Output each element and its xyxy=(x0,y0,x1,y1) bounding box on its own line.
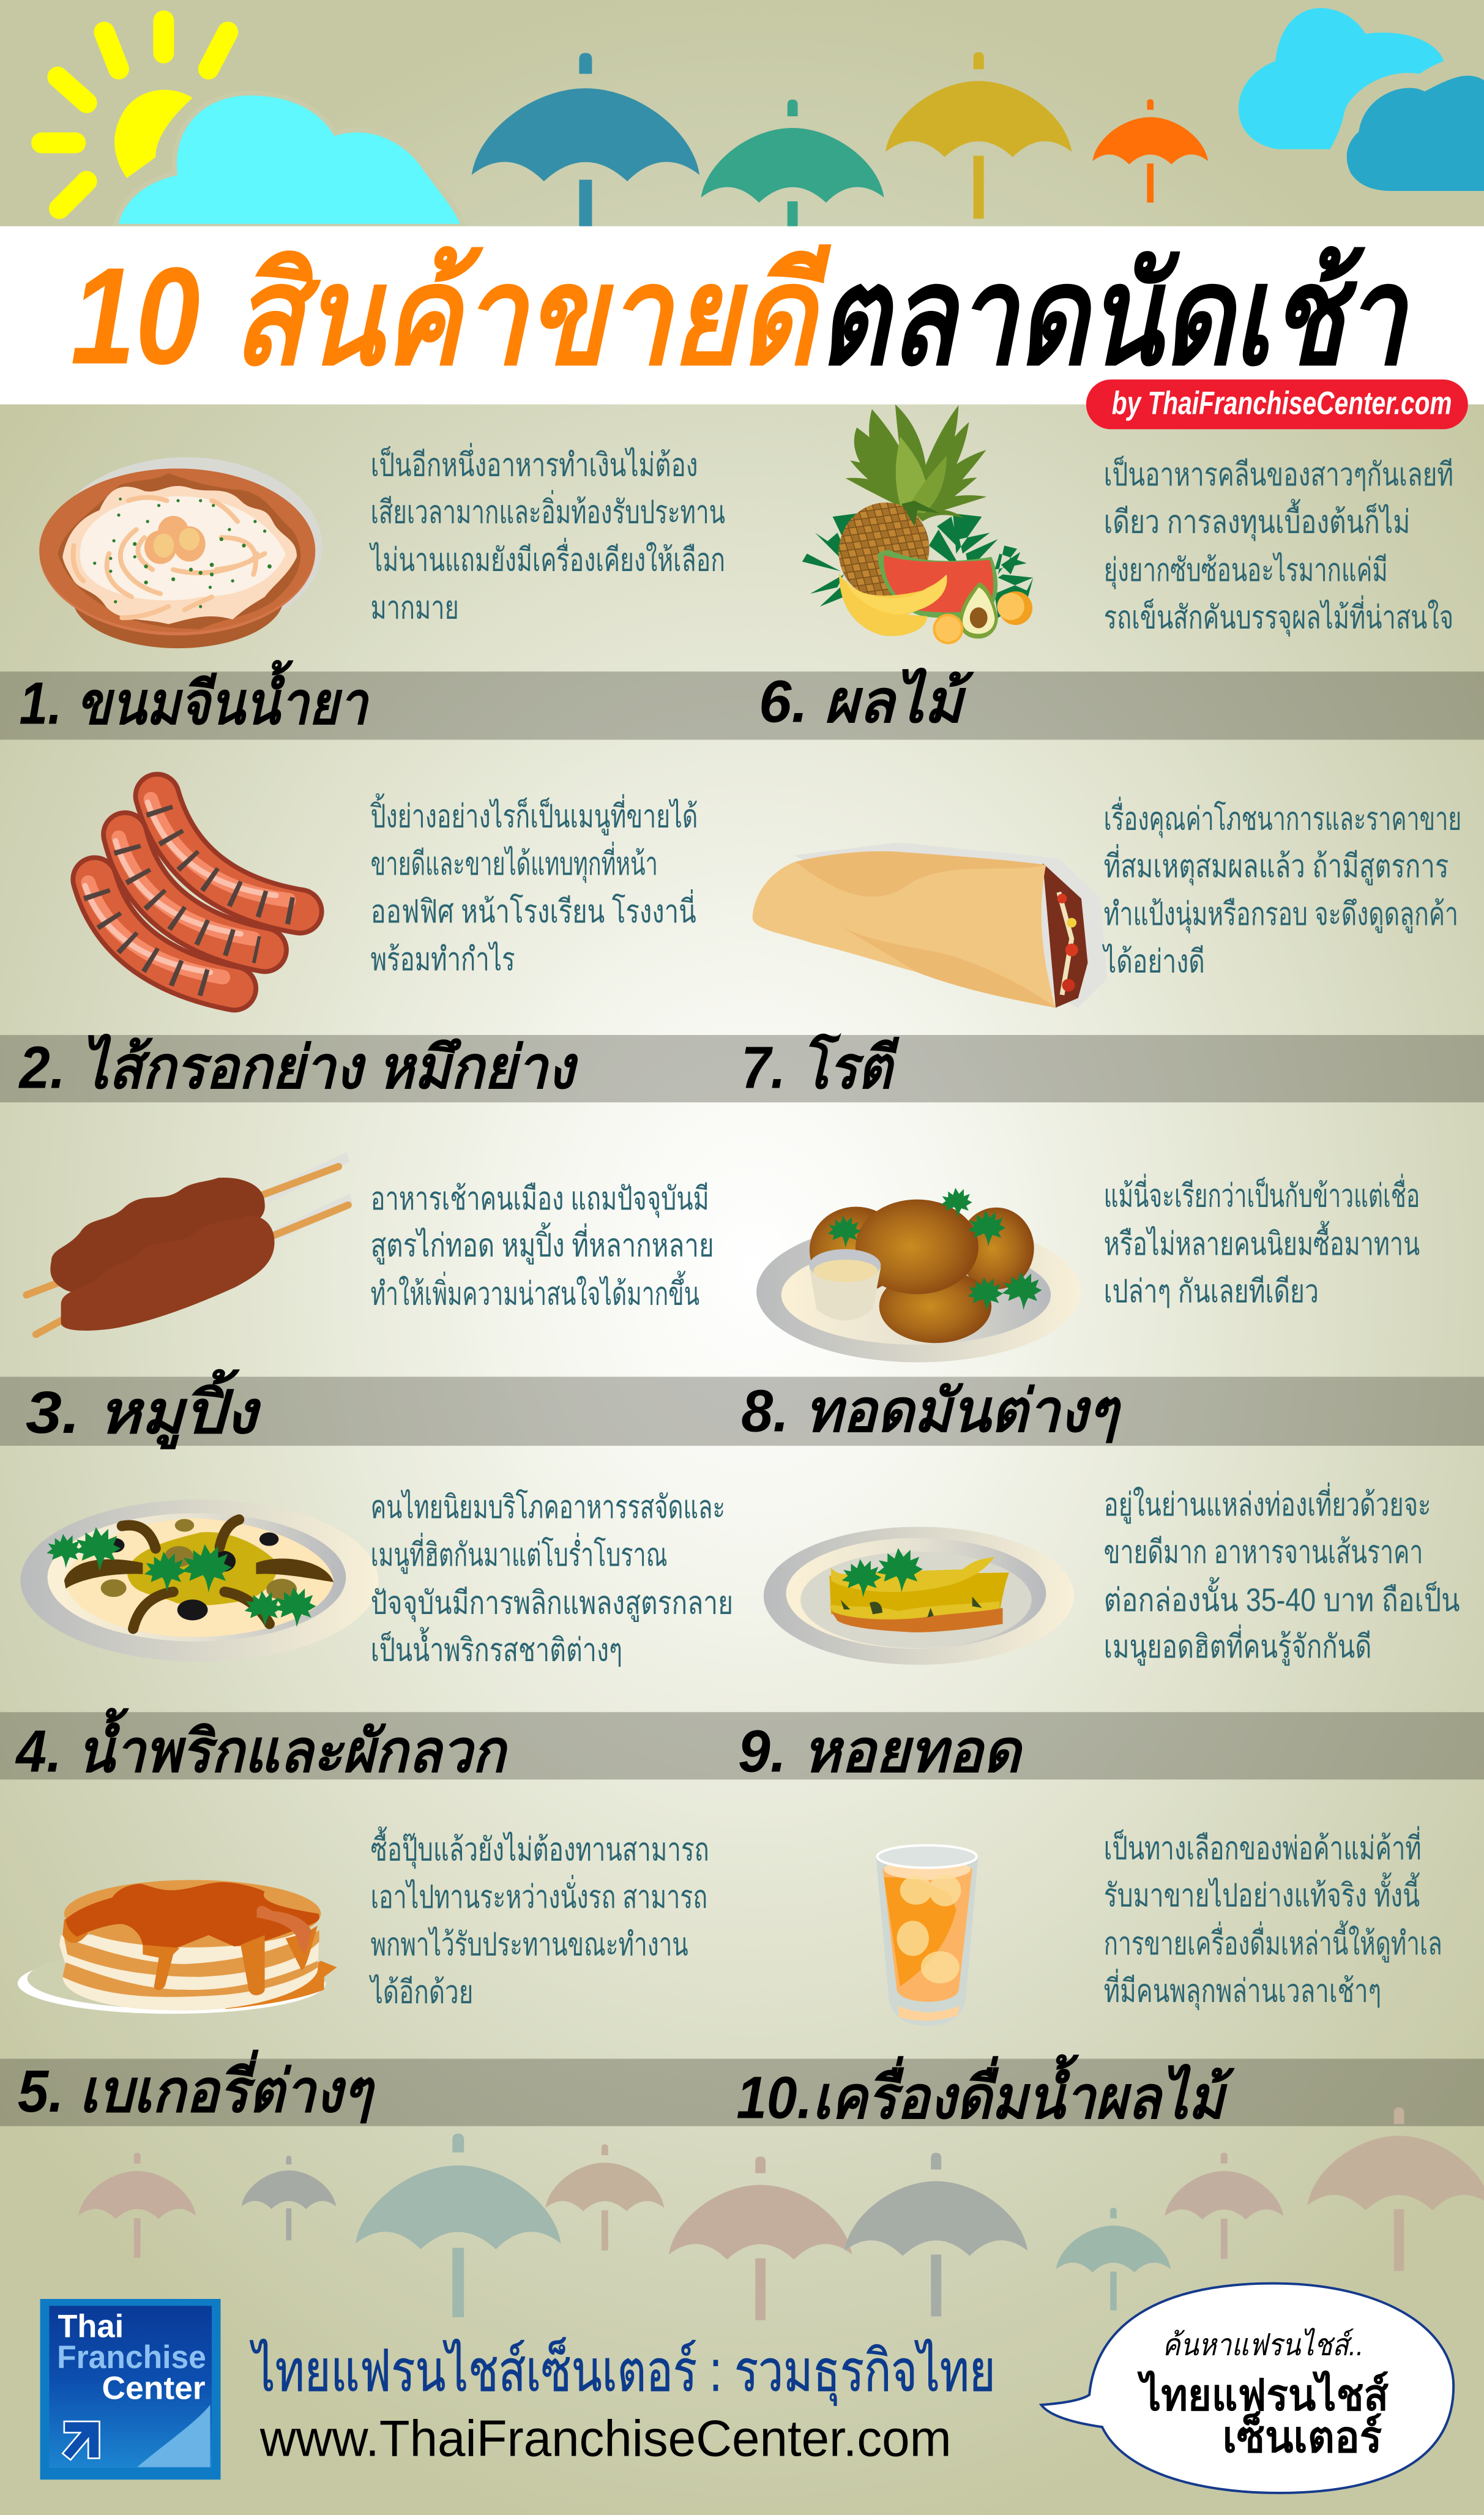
item 4 text xyxy=(371,1489,733,1668)
item 5 text: ซื้อปุ๊บแล้วยังไม่ต้องทานสามารถ xyxy=(371,1826,709,1869)
icon: blue umbrella xyxy=(472,53,699,256)
band 5 xyxy=(0,2049,1484,2131)
logo: Thai Franchise Center: Franchise xyxy=(57,2340,206,2375)
heading 9: 9. หอยทอด xyxy=(738,1717,1023,1784)
item 4 text: คนไทยนิยมบริโภคอาหารรสจัดและ xyxy=(371,1489,725,1525)
band 1 xyxy=(0,659,1484,740)
item 5 text: พกพาไว้รับประทานขณะทำงาน xyxy=(371,1926,688,1963)
icon: sun xyxy=(42,21,228,209)
item 2 text xyxy=(370,793,698,977)
band 2 xyxy=(0,1033,1484,1102)
item 8 illustration: tod man plate xyxy=(756,1188,1081,1362)
item 1 text: มากมาย xyxy=(371,591,459,626)
speech bubble xyxy=(1041,2284,1453,2493)
heading 3: 3. หมูปิ้ง xyxy=(26,1369,262,1449)
item 4 illustration: nam prik plate xyxy=(21,1500,378,1662)
heading 8: 8. ทอดมันต่างๆ xyxy=(741,1377,1122,1444)
item 10 text: ที่มีคนพลุกพล่านเวลาเช้าๆ xyxy=(1104,1969,1381,2011)
item 1 text: เสียเวลามากและอิ่มท้องรับประทาน xyxy=(371,490,725,531)
item 7 illustration: roti xyxy=(753,842,1107,1007)
item 6 text: เดียว การลงทุนเบื้องต้นก็ไม่ xyxy=(1104,498,1410,541)
item 10 illustration: fruit juice glass xyxy=(876,1845,978,2026)
item 5 text: เอาไปทานระหว่างนั่งรถ สามารถ xyxy=(371,1875,707,1915)
item 6 illustration: fruits xyxy=(802,405,1033,645)
badge: by ThaiFranchiseCenter.com xyxy=(1086,379,1468,429)
icon: orange umbrella xyxy=(1092,99,1208,203)
item 5 text xyxy=(369,1826,709,2011)
item 3 text: อาหารเช้าคนเมือง แถมปัจจุบันมี xyxy=(371,1181,709,1218)
icon: yellow umbrella xyxy=(886,52,1072,219)
item 9 illustration: hoi tod plate xyxy=(764,1527,1074,1665)
item 7 text: ได้อย่างดี xyxy=(1102,943,1205,980)
item 3 text: ทำให้เพิ่มความน่าสนใจได้มากขึ้น xyxy=(371,1270,699,1312)
item 8 text: เปล่าๆ กันเลยทีเดียว xyxy=(1104,1274,1319,1309)
item 2 text: พร้อมทำกำไร xyxy=(371,941,515,977)
heading 10: 10.เครื่องดื่มน้ำผลไม้ xyxy=(736,2054,1235,2131)
logo: Thai Franchise Center xyxy=(40,2299,220,2479)
item 4 text: เมนูที่ฮิตกันมาแต่โบร่ำโบราณ xyxy=(371,1533,668,1574)
footer heading: ไทยแฟรนไชส์เซ็นเตอร์ : รวมธุรกิจไทย xyxy=(249,2337,996,2406)
item 2 text: ขายดีและขายได้แทบทุกที่หน้า xyxy=(371,842,658,883)
item 3 illustration: grilled pork skewers xyxy=(26,1152,353,1334)
item 3 text xyxy=(371,1181,714,1312)
item 7 text xyxy=(1102,796,1461,980)
heading 7: 7. โรตี xyxy=(741,1033,900,1101)
item 1 text: เป็นอีกหนึ่งอาหารทำเงินไม่ต้อง xyxy=(371,443,698,483)
item 9 text xyxy=(1104,1482,1460,1666)
item 5 text: ได้อีกด้วย xyxy=(369,1974,473,2011)
band 3 xyxy=(0,1369,1484,1449)
item 2 text: ออฟฟิศ หน้าโรงเรียน โรงงานี่ xyxy=(371,889,696,930)
heading 5: 5. เบเกอรี่ต่างๆ xyxy=(18,2049,376,2124)
speech bubble: เซ็นเตอร์ xyxy=(1223,2411,1382,2461)
item 5 illustration: pancakes xyxy=(18,1880,337,2014)
item 1 text: ไม่นานแถมยังมีเครื่องเคียงให้เลือก xyxy=(369,538,725,578)
speech bubble: ไทยแฟรนไชส์ xyxy=(1136,2370,1389,2420)
icon: light blue cloud xyxy=(1239,8,1444,149)
logo: Thai Franchise Center: Thai xyxy=(58,2309,124,2344)
footer url: www.ThaiFranchiseCenter.com xyxy=(259,2410,952,2467)
heading 2: 2. ไส้กรอกย่าง หมึกย่าง xyxy=(18,1033,579,1101)
item 9 text: เมนูยอดฮิตที่คนรู้จักกันดี xyxy=(1104,1624,1371,1666)
speech bubble: ค้นหาแฟรนไชส์.. xyxy=(1162,2328,1363,2362)
heading 6: 6. ผลไม้ xyxy=(759,668,974,735)
item 6 text: ยุ่งยากซับซ้อนอะไรมากแค่มี xyxy=(1104,551,1388,589)
icon: dark blue cloud xyxy=(1347,76,1484,191)
item 3 text: สูตรไก่ทอด หมูปิ้ง ที่หลากหลาย xyxy=(371,1222,714,1265)
item 8 text xyxy=(1104,1173,1420,1309)
item 4 text: ปัจจุบันมีการพลิกแพลงสูตรกลาย xyxy=(371,1585,733,1622)
title: orange part: 10 สินค้าขายดี xyxy=(70,239,832,393)
band 4 xyxy=(0,1707,1484,1784)
title banner xyxy=(0,226,1484,405)
icon: green umbrella xyxy=(701,100,884,263)
heading 1: 1. ขนมจีนน้ำยา xyxy=(19,659,369,736)
item 2 text: ปิ้งย่างอย่างไรก็เป็นเมนูที่ขายได้ xyxy=(370,793,698,835)
icon: logo arrow xyxy=(62,2421,100,2460)
heading 4: 4. น้ำพริกและผักลวก xyxy=(15,1707,509,1784)
item 10 text xyxy=(1104,1826,1442,2011)
item 6 text xyxy=(1104,456,1453,637)
icon: cyan cloud xyxy=(116,93,464,226)
item 2 illustration: grilled sausages xyxy=(85,796,300,988)
item 1 illustration: khanom jeen bowl xyxy=(39,457,323,648)
logo: Thai Franchise Center: Center xyxy=(102,2371,206,2406)
faded umbrellas row xyxy=(78,2107,1484,2320)
item 4 text: เป็นน้ำพริกรสชาติต่างๆ xyxy=(371,1626,622,1668)
item 1 text xyxy=(369,443,725,626)
